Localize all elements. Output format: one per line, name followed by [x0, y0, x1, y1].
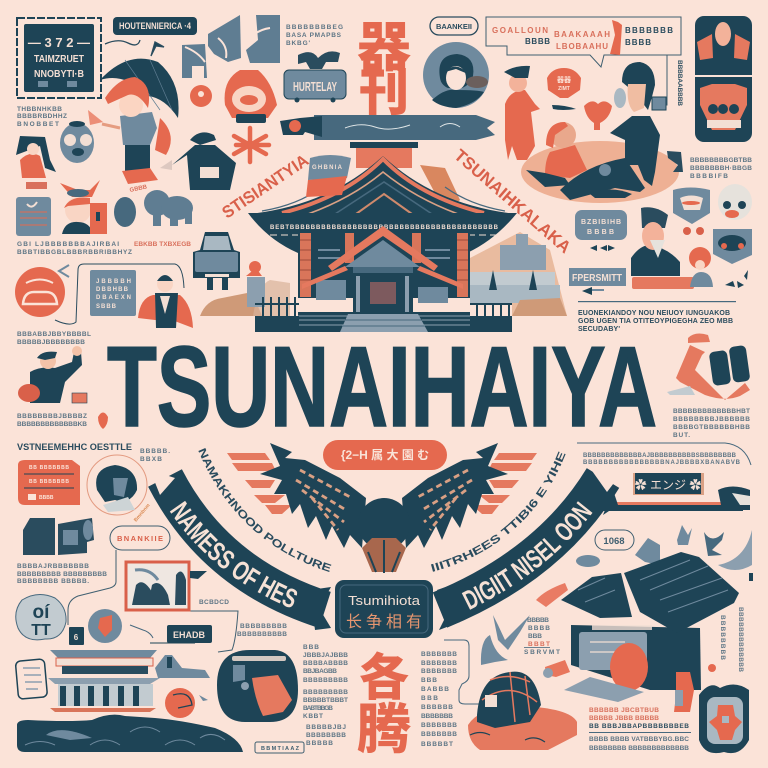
center badge: 长 争 相 有 [346, 613, 422, 631]
slate circle with coral [88, 609, 122, 643]
coral circle icon [15, 267, 65, 317]
small text block top: BBBBBBBBEG [286, 24, 343, 31]
vertical text right [719, 607, 744, 672]
helmet side text: BBBBBJBJ [306, 724, 346, 731]
text column center: BBBBBBB [421, 713, 453, 720]
side text: BBBBBBBH·BBGB [690, 165, 752, 172]
helmet side text: BBJBAGBB [303, 668, 337, 675]
small text block top: BASA PMAPBS [286, 32, 342, 39]
coral top pill: {2−H 属 大 園 む [341, 447, 429, 462]
right paragraph below figure: BBBBBBBBBBBBBHBT [673, 408, 750, 415]
speech bubble: LBOBAAHU [556, 42, 608, 51]
text column center [421, 651, 457, 748]
side text [690, 157, 752, 180]
small navy box [69, 627, 84, 645]
right text top with curve [577, 443, 751, 466]
coral head [165, 688, 208, 718]
framed painting [126, 562, 207, 610]
coral list panel: BB BBBBBBB [29, 465, 69, 471]
left ribbon [148, 469, 331, 630]
small arrows [590, 245, 615, 251]
text column center: BBBBBBB [421, 660, 457, 667]
helmet side text: BBB [303, 644, 319, 651]
navy woman [610, 62, 660, 186]
coral top pill [323, 440, 447, 470]
center badge: Tsumihiota [348, 593, 421, 608]
curved text left: NAMAKHNOOD POLLTURE [198, 448, 332, 572]
connector and side note: BBBBAABBBB [676, 60, 683, 106]
big characters top: 刊 [359, 65, 409, 121]
paragraph lower-left [17, 563, 107, 585]
praying figure [138, 275, 193, 328]
temple eaves [248, 213, 517, 253]
waves [17, 715, 243, 752]
temple eaves: BEBTBBBBBBBBBBBBBBBBBBBBBBBBBBBBBBBBBBBBBBBB [270, 225, 499, 231]
stamp sign: NNOBYTI·B [34, 69, 84, 80]
scene oval [521, 122, 679, 203]
big characters top: 器 [357, 18, 411, 78]
text near pill: BBBBBBBBB [240, 623, 287, 630]
long ribbon band [280, 115, 495, 140]
tall mask panel [695, 16, 752, 142]
temple walls [298, 232, 470, 303]
seated old man [631, 207, 694, 289]
right wing [402, 443, 508, 548]
slate plant [481, 615, 530, 665]
stamp sign: — 3 7 2 — [28, 35, 90, 50]
text column center: BBB [421, 695, 438, 702]
text column center: BBBBBBB [421, 722, 457, 729]
small navy box: 6 [74, 633, 79, 642]
bird scrawl [130, 625, 153, 638]
outlined pill [430, 17, 478, 35]
right ribbon: DIGIIT NISEL OON [462, 501, 592, 610]
outlined small label: BBMTIAAZ [261, 746, 300, 752]
caption lines: EBKBB TXBXEGB [134, 241, 191, 248]
temple [248, 142, 517, 332]
top label pill: HOUTENNIERICA ·4 [119, 21, 191, 31]
note outline [15, 659, 48, 699]
slate text box right [575, 210, 627, 240]
side text: BBBBIFB [690, 173, 728, 180]
tiny center text: BBB [528, 633, 542, 640]
brush stroke and coral heart [552, 101, 612, 130]
year pill [595, 530, 634, 550]
outlined pill: BAANKEII [436, 22, 472, 31]
station sign and platform: ✿ エンジ ✿ [635, 478, 701, 492]
slate panel [16, 197, 51, 236]
circle portrait lower-left: Bmnbnm [133, 502, 152, 523]
slate cloud [16, 594, 66, 640]
big characters bottom: 腾 [357, 700, 411, 760]
big characters bottom: 各 [359, 650, 409, 706]
red figure [504, 66, 540, 160]
emblem [699, 684, 749, 753]
cityscape [470, 232, 567, 316]
navy house [561, 552, 739, 702]
coral list panel: BB BBBBBBB [29, 479, 69, 485]
coral list panel: BBBB [39, 495, 54, 501]
tiny center text: BBBT [528, 641, 550, 648]
fox hat boy [60, 180, 107, 234]
coral shield: 器器 [557, 76, 571, 84]
salmon stripes [227, 453, 537, 514]
helmet side text: KBBT [303, 713, 323, 720]
text near pill [237, 623, 287, 638]
slate text box: DBBHBB [96, 287, 129, 293]
waving figure [18, 346, 87, 403]
stamp sign [17, 18, 101, 98]
text column center: BBBBBBB [421, 731, 457, 738]
small text near heading: BBXB [140, 456, 162, 463]
year pill: 1068 [603, 536, 625, 547]
caption lines: BBBTIBBGBLBBBRBBRIBBHYZ [17, 249, 132, 256]
plane vehicle [155, 655, 210, 678]
small coral figure [16, 136, 56, 189]
paragraph lower-left: BBBBBBBBB BBBBBBBBB [17, 571, 107, 578]
curved label left: STISIANTYIA [219, 151, 312, 222]
bus sign: HURTELAY [293, 79, 337, 94]
slate text box [90, 270, 136, 316]
small bird arrows [725, 270, 748, 288]
text column center: BBB [421, 677, 437, 684]
small text block top [286, 24, 343, 47]
car [193, 232, 240, 290]
connector and side note [652, 55, 683, 110]
paragraph lower-left: BBBBBBBB BBBBB. [17, 578, 89, 585]
coral flower [190, 85, 212, 107]
coral text pill: BNANKIIE [117, 534, 163, 543]
navy bird mark [667, 151, 683, 172]
big characters top [357, 18, 411, 121]
left paragraph under figure [17, 413, 87, 428]
temple back roof [420, 165, 460, 212]
tiny center text: SBRVMT [524, 649, 560, 656]
navy pill lower-left: EHADB [173, 630, 205, 640]
right paragraph: SECUDABY' [578, 326, 620, 333]
dark machine [23, 518, 94, 555]
flag [306, 155, 351, 197]
helmet side text: BBBBB [306, 740, 333, 747]
coral pin [98, 412, 108, 429]
small label text left [17, 106, 67, 128]
stamp sign: TAIMZRUET [34, 54, 84, 65]
dark cloaked figure [160, 132, 236, 190]
umbrella [100, 59, 179, 118]
text lower right: BBBBB JBBB BBBBB [589, 715, 659, 722]
circle portrait lower-left [87, 455, 152, 523]
curved text right: IIITRHEES TTIBI6 E YIHE [431, 452, 566, 572]
right paragraph: EUONEKIANDOY NOU NEIUOY IUNGUAKOB [578, 310, 730, 317]
helmet side text: BABTBBGB [303, 705, 333, 712]
speech bubble: BBBB [625, 38, 651, 47]
left wing [260, 443, 366, 548]
right ribbon [433, 468, 620, 630]
bracket connector [444, 640, 480, 704]
temple lower gable [302, 226, 463, 289]
navy helmet portrait [217, 650, 298, 722]
tiny center text: BBBB [528, 625, 550, 632]
temple door [353, 267, 413, 313]
left paragraph under figure: BBBBBBBBJBBBBZ [17, 413, 87, 420]
small label text left: THBBNHKBB [17, 106, 62, 113]
helmet side text: BBBBBBBBB [303, 689, 348, 696]
slate cloud: TT [31, 622, 51, 639]
right paragraph below figure: BBBBBBBBJBBBBBB [673, 416, 750, 423]
side text: BBBBBBBBGBTBB [690, 157, 752, 164]
connectors lower-left [68, 550, 238, 652]
text lower right: BBBB BBBB VATBBBYBG.BBC [589, 736, 689, 743]
helmet side text: BBBBBBBBB [303, 677, 348, 684]
temple fences [255, 297, 512, 332]
slate shield mask [673, 188, 710, 224]
helmet side text: BBBBBTBBBT [303, 697, 348, 704]
small label text left: BNOBBET [17, 121, 59, 128]
standing coral figure [674, 664, 716, 712]
right text top with curve: BBBBBBBBBBBBBBBBNAJBBBBXBANABVB [583, 460, 741, 466]
vertical text right: BBBBBBBB [719, 615, 726, 660]
coral shield [547, 68, 581, 98]
helmet side text: BBBBBBBB [306, 732, 346, 739]
slate text box: DBAEXN [96, 295, 131, 301]
text column center: BBBBBBB [421, 651, 457, 658]
right text top with curve: BBBBBBBBBBBBBAJBBBBBBBBBBSBBBBBBBB [583, 453, 737, 459]
coral figure with barrels [667, 334, 750, 400]
bird scribble [105, 40, 164, 56]
temple main roof [250, 156, 516, 214]
speech bubble: BBBB [525, 37, 550, 46]
coral text pill [110, 526, 170, 550]
left paragraph under figure: BBBBBBBBBBBBBKB [17, 421, 87, 428]
arrow and connector [55, 264, 184, 324]
girl with umbrella [88, 77, 171, 184]
pavilion building [48, 650, 160, 712]
top-left paragraph above figure [17, 331, 91, 346]
slate text box right: BBBB [587, 229, 614, 236]
small label text left: BBBBRBDHHZ [17, 113, 67, 120]
speech bubble: BAAKAAAH [554, 30, 610, 39]
orange haired kid [689, 247, 713, 287]
speech bubble [486, 17, 681, 67]
small text near heading: BBBBB. [140, 448, 170, 455]
eagle [227, 443, 537, 573]
right paragraph below figure: BBBBGTBBBBBBHBB [673, 424, 750, 431]
bus sign [284, 51, 346, 102]
right paragraph [578, 301, 736, 333]
center badge [335, 580, 433, 638]
text lower right: BB BBBJBBAPBBBBBBBEB [589, 723, 689, 730]
paragraph lower-left: BBBBAJRBBBBBBB [17, 563, 89, 570]
slate map shapes [182, 15, 280, 78]
speech bubble: BBBBBBB [625, 26, 673, 35]
small caption: BCBDCD [199, 599, 229, 606]
tiny center text: BBBBB [527, 617, 549, 624]
top-left paragraph above figure: BBBBBJBBBBBBBB [17, 339, 85, 346]
text column center: BBBBBB [421, 704, 453, 711]
coral list panel [18, 460, 80, 505]
right paragraph below figure: BUT. [673, 432, 690, 439]
slate mask [60, 121, 94, 163]
slate text box right: BZBIBIHB [581, 219, 621, 226]
portrait circle [423, 42, 489, 108]
coral asterisk [234, 128, 269, 162]
red bearded figure and hills [200, 261, 290, 316]
label slate [569, 268, 626, 295]
pale face mask [718, 184, 752, 220]
outlined small label [255, 742, 304, 753]
helmet side text: JBBBJAJBBB [303, 652, 348, 659]
caption lines: GBI LJBBBBBBBAJIRBAI [17, 241, 119, 248]
body [358, 498, 410, 550]
top-left paragraph above figure: BBBABBJBBYBBBBL [17, 331, 91, 338]
coral tag: GBBB [129, 184, 148, 194]
station sign and platform [603, 473, 750, 515]
vertical text right: BBBBBBBBBBBBB [737, 607, 744, 672]
small text near heading [140, 448, 170, 463]
big characters bottom [357, 650, 411, 760]
text lower right: BBBBBB JBCBTBUB [589, 707, 659, 714]
text lower right: BBBBBBBB BBBBBBBBBBBBB [589, 745, 689, 752]
right paragraph below figure [673, 408, 750, 439]
navy pill lower-left [150, 625, 212, 643]
coral shield: ZIMT [558, 86, 570, 92]
slate cloud: oí [33, 602, 50, 623]
text lower right [589, 707, 691, 752]
right paragraph: GOB UGEN TIA OTITEOYPIGEGHA ZEO MBB [578, 318, 733, 325]
small text block top: BKBG' [286, 40, 310, 47]
coral mask [225, 70, 277, 123]
temple steps and base [298, 312, 470, 332]
section heading lower-left: VSTNEEMEHHC OESTTLE [17, 442, 132, 452]
slate decorations [576, 525, 753, 581]
helmet side text: BBBBABBBB [303, 660, 348, 667]
helmet side text [303, 644, 348, 747]
slate text box: SBBB [96, 304, 117, 310]
text column center: BABBB [421, 686, 449, 693]
flag: GHBNIA [312, 165, 343, 171]
text column center: BBBBBBB [421, 668, 457, 675]
left ribbon: NAMESS OF HES [170, 500, 298, 608]
curved label right: TSUNAIHKALAKA [450, 146, 575, 257]
speech bubble: GOALLOUN [492, 26, 548, 35]
slate elephants [114, 190, 193, 227]
text column center: BBBBBT [421, 741, 453, 748]
slate text box: JBBBBH [96, 279, 131, 285]
coral dots [683, 227, 704, 235]
coral helmet dome [468, 672, 577, 750]
label slate: FPERSMITT [572, 273, 622, 284]
coral bits [536, 583, 570, 678]
temple ridge [350, 142, 418, 168]
caption lines [17, 241, 191, 256]
top label pill [113, 17, 197, 35]
tiny center text [524, 617, 560, 656]
text near pill: BBBBBBBBBB [237, 631, 287, 638]
slate shield dark [713, 229, 752, 264]
